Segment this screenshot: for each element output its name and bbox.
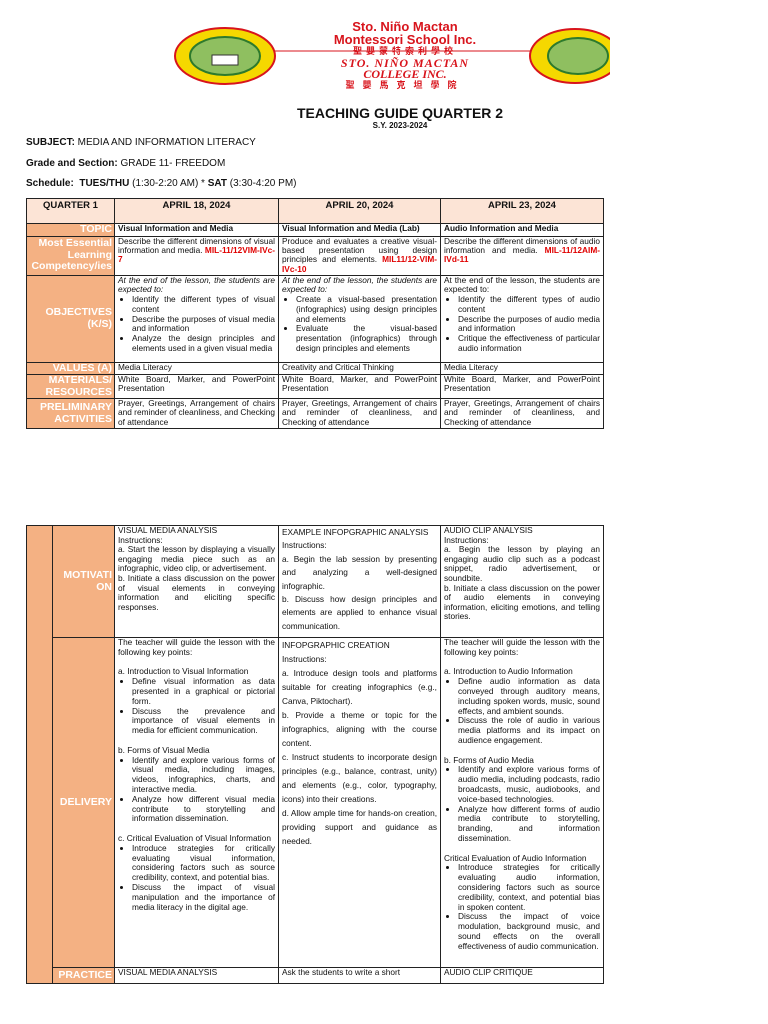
table: lesson procedure: b. Initiate a class discussion on the power of audio elements in conveying information, eliciting emotions, and telling stories.: [444, 583, 600, 621]
table: lesson overview: Describe the different dimensions of visual information and media. MIL-11/12VIM-IVc-7: [118, 236, 275, 264]
table: lesson procedure: Identify and explore various forms of visual media, including images, videos, infographics, charts, and interactive media.: [132, 755, 275, 794]
table: lesson procedure: a. Begin the lab session by presenting and analyzing a well-designed infographic.: [282, 554, 437, 591]
subject info: Grade and Section: GRADE 11- FREEDOM: [26, 158, 225, 168]
table: lesson procedure: a. Introduction to Audio Information: [444, 666, 573, 676]
table: lesson overview: [26, 198, 604, 429]
table: lesson overview: Describe the purposes of audio media and information: [458, 314, 600, 333]
table: lesson overview: Identify the different types of visual content: [132, 294, 275, 314]
header: school logos and names: [174, 27, 610, 85]
table: lesson procedure: b. Provide a theme or topic for the infographics, aligning with the course content.: [282, 710, 437, 748]
table: lesson procedure: Define visual information as data presented in a graphical or pictorial form.: [132, 676, 275, 706]
table: lesson procedure: a. Start the lesson by displaying a visually engaging media piece such as an infographic, video clip, or advertisement.: [118, 544, 275, 573]
title: TEACHING GUIDE QUARTER 2: [297, 105, 503, 121]
school name block: Sto. Niño Mactan: [352, 19, 458, 34]
table: lesson procedure: b. Discuss how design principles and elements are applied to enhance visual communication.: [282, 594, 437, 631]
table: lesson procedure: The teacher will guide the lesson with the following key points:: [444, 638, 600, 657]
table: lesson procedure: Introduce strategies for critically evaluating audio information, considering factors such as source credibility, context, and potential bias in spoken content.: [458, 862, 600, 912]
title: [297, 105, 503, 130]
icon: right logo: [530, 29, 620, 83]
table: lesson procedure: d. Allow ample time for hands-on creation, providing support and guidance as needed.: [282, 808, 437, 846]
table: lesson overview: Describe the purposes of visual media and information: [132, 314, 275, 333]
table: lesson procedure: Instructions:: [282, 654, 327, 664]
subject info: [26, 137, 296, 189]
table: lesson overview: Produce and evaluates a creative visual-based presentation using design principles and elements. MIL11/12-VIM-IVc-10: [282, 236, 437, 274]
table: lesson overview: PRELIMINARY ACTIVITIES: [40, 401, 112, 424]
table: lesson overview: Prayer, Greetings, Arrangement of chairs and reminder of cleanliness, and Checking of attendance: [118, 398, 275, 427]
icon: left logo: [175, 28, 275, 84]
table: lesson procedure: Instructions:: [444, 535, 489, 545]
table: lesson procedure: Analyze how different visual media contribute to storytelling and information dissemination.: [132, 794, 275, 823]
table: lesson procedure: Identify and explore various forms of audio media, including podcasts, radio broadcasts, music, audiobooks, and voice-based technologies.: [458, 764, 600, 804]
table: lesson procedure: EXAMPLE INFOPGRAPHIC ANALYSIS: [282, 527, 428, 537]
table: lesson overview: Prayer, Greetings, Arrangement of chairs and reminder of cleanliness, and Checking of attendance: [444, 398, 600, 427]
table: lesson procedure: Critical Evaluation of Audio Information: [444, 853, 587, 863]
table: lesson procedure: b. Forms of Visual Media: [118, 745, 210, 755]
table: lesson overview: Critique the effectiveness of particular audio information: [458, 333, 600, 353]
table: lesson overview: APRIL 23, 2024: [488, 200, 556, 211]
table: lesson overview: White Board, Marker, and PowerPoint Presentation: [118, 374, 275, 393]
table: lesson overview: Identify the different types of audio content: [458, 294, 600, 314]
table: lesson procedure: Discuss the role of audio in various media platforms and its impact on audience engagement.: [458, 715, 600, 745]
table: lesson procedure: Discuss the prevalence and importance of visual elements in media for efficient communication.: [132, 706, 275, 735]
table: lesson procedure: [26, 525, 604, 984]
table: lesson overview: Analyze the design principles and elements used in a given visual media: [132, 333, 275, 353]
table: lesson overview: Evaluate the visual-based presentation (infographics) through design principles and elements: [296, 323, 437, 353]
table: lesson overview: MATERIALS/ RESOURCES: [45, 374, 112, 398]
table: lesson procedure: INFOPGRAPHIC CREATION: [282, 640, 390, 650]
table: lesson overview: Most Essential Learning Competency/ies: [31, 237, 112, 272]
table: lesson overview: Create a visual-based presentation (infographics) using design principles and elements: [296, 294, 437, 324]
table: lesson procedure: DELIVERY: [60, 796, 112, 808]
table: lesson overview: At the end of the lesson, the students are expected to:: [282, 275, 437, 294]
table: lesson procedure: PRACTICE: [58, 969, 112, 981]
subject info: SUBJECT: MEDIA AND INFORMATION LITERACY: [26, 137, 256, 148]
table: lesson overview: APRIL 20, 2024: [326, 200, 393, 211]
table: lesson procedure: The teacher will guide the lesson with the following key points:: [118, 638, 275, 657]
table: lesson procedure: a. Introduce design tools and platforms suitable for creating infographics (e.g., Canva, Piktochart).: [282, 668, 437, 706]
table: lesson overview: White Board, Marker, and PowerPoint Presentation: [282, 374, 437, 393]
table: lesson procedure: c. Instruct students to incorporate design principles (e.g., balance, contrast, unity) and elements (e.g., color, typography, icons) into their creations.: [282, 752, 437, 804]
table: lesson overview: At the end of the lesson, the students are expected to:: [118, 275, 275, 294]
table: lesson procedure: Instructions:: [118, 535, 163, 545]
table: lesson procedure: Instructions:: [282, 540, 327, 550]
table: lesson procedure: b. Forms of Audio Media: [444, 755, 534, 765]
school name block: 聖嬰馬克坦學院: [345, 80, 464, 90]
table: lesson procedure: Discuss the impact of visual manipulation and the importance of media literacy in the digital age.: [132, 882, 275, 912]
table: lesson overview: Prayer, Greetings, Arrangement of chairs and reminder of cleanliness, and Checking of attendance: [282, 398, 437, 427]
table: lesson procedure: a. Begin the lesson by playing an engaging audio clip such as a podcast snippet, radio advertisement, or soundbite.: [444, 544, 600, 583]
school name block: 聖嬰蒙特索利學校: [353, 46, 457, 56]
table: lesson procedure: Introduce strategies for critically evaluating visual information, considering factors such as source credibility, context, and potential bias.: [132, 843, 275, 882]
table: lesson procedure: a. Introduction to Visual Information: [118, 666, 248, 676]
table: lesson overview: At the end of the lesson, the students are expected to:: [444, 275, 600, 294]
school name block: Montessori School Inc.: [334, 32, 476, 47]
table: lesson procedure: b. Initiate a class discussion on the power of visual elements in conveying information and eliciting specific responses.: [118, 573, 275, 612]
table: lesson procedure: Analyze how different forms of audio media contribute to storytelling, branding, and information dissemination.: [458, 804, 600, 843]
table: lesson procedure: c. Critical Evaluation of Visual Information: [118, 833, 271, 843]
table: lesson overview: APRIL 18, 2024: [163, 200, 230, 211]
school name block: STO. NIÑO MACTAN: [341, 56, 469, 70]
title: S.Y. 2023-2024: [373, 121, 427, 130]
table: lesson overview: QUARTER 1: [43, 200, 98, 211]
table: lesson procedure: Discuss the impact of voice modulation, background music, and sound effects on the overall effectiveness of audio communication.: [458, 911, 600, 951]
school name block: COLLEGE INC.: [363, 67, 447, 81]
table: lesson procedure: MOTIVATI ON: [63, 569, 112, 592]
table: lesson overview: Describe the different dimensions of audio information and media. MIL-11/12AIM-IVd-11: [444, 236, 600, 264]
school name block: [334, 19, 476, 90]
table: lesson overview: OBJECTIVES (K/S): [45, 306, 112, 330]
table: lesson overview: White Board, Marker, and PowerPoint Presentation: [444, 374, 600, 393]
subject info: Schedule: TUES/THU (1:30-2:20 AM) * SAT (3:30-4:20 PM): [26, 178, 296, 189]
table: lesson procedure: Define audio information as data conveyed through auditory means, including spoken words, music, sound effects, and ambient sounds.: [458, 676, 600, 716]
